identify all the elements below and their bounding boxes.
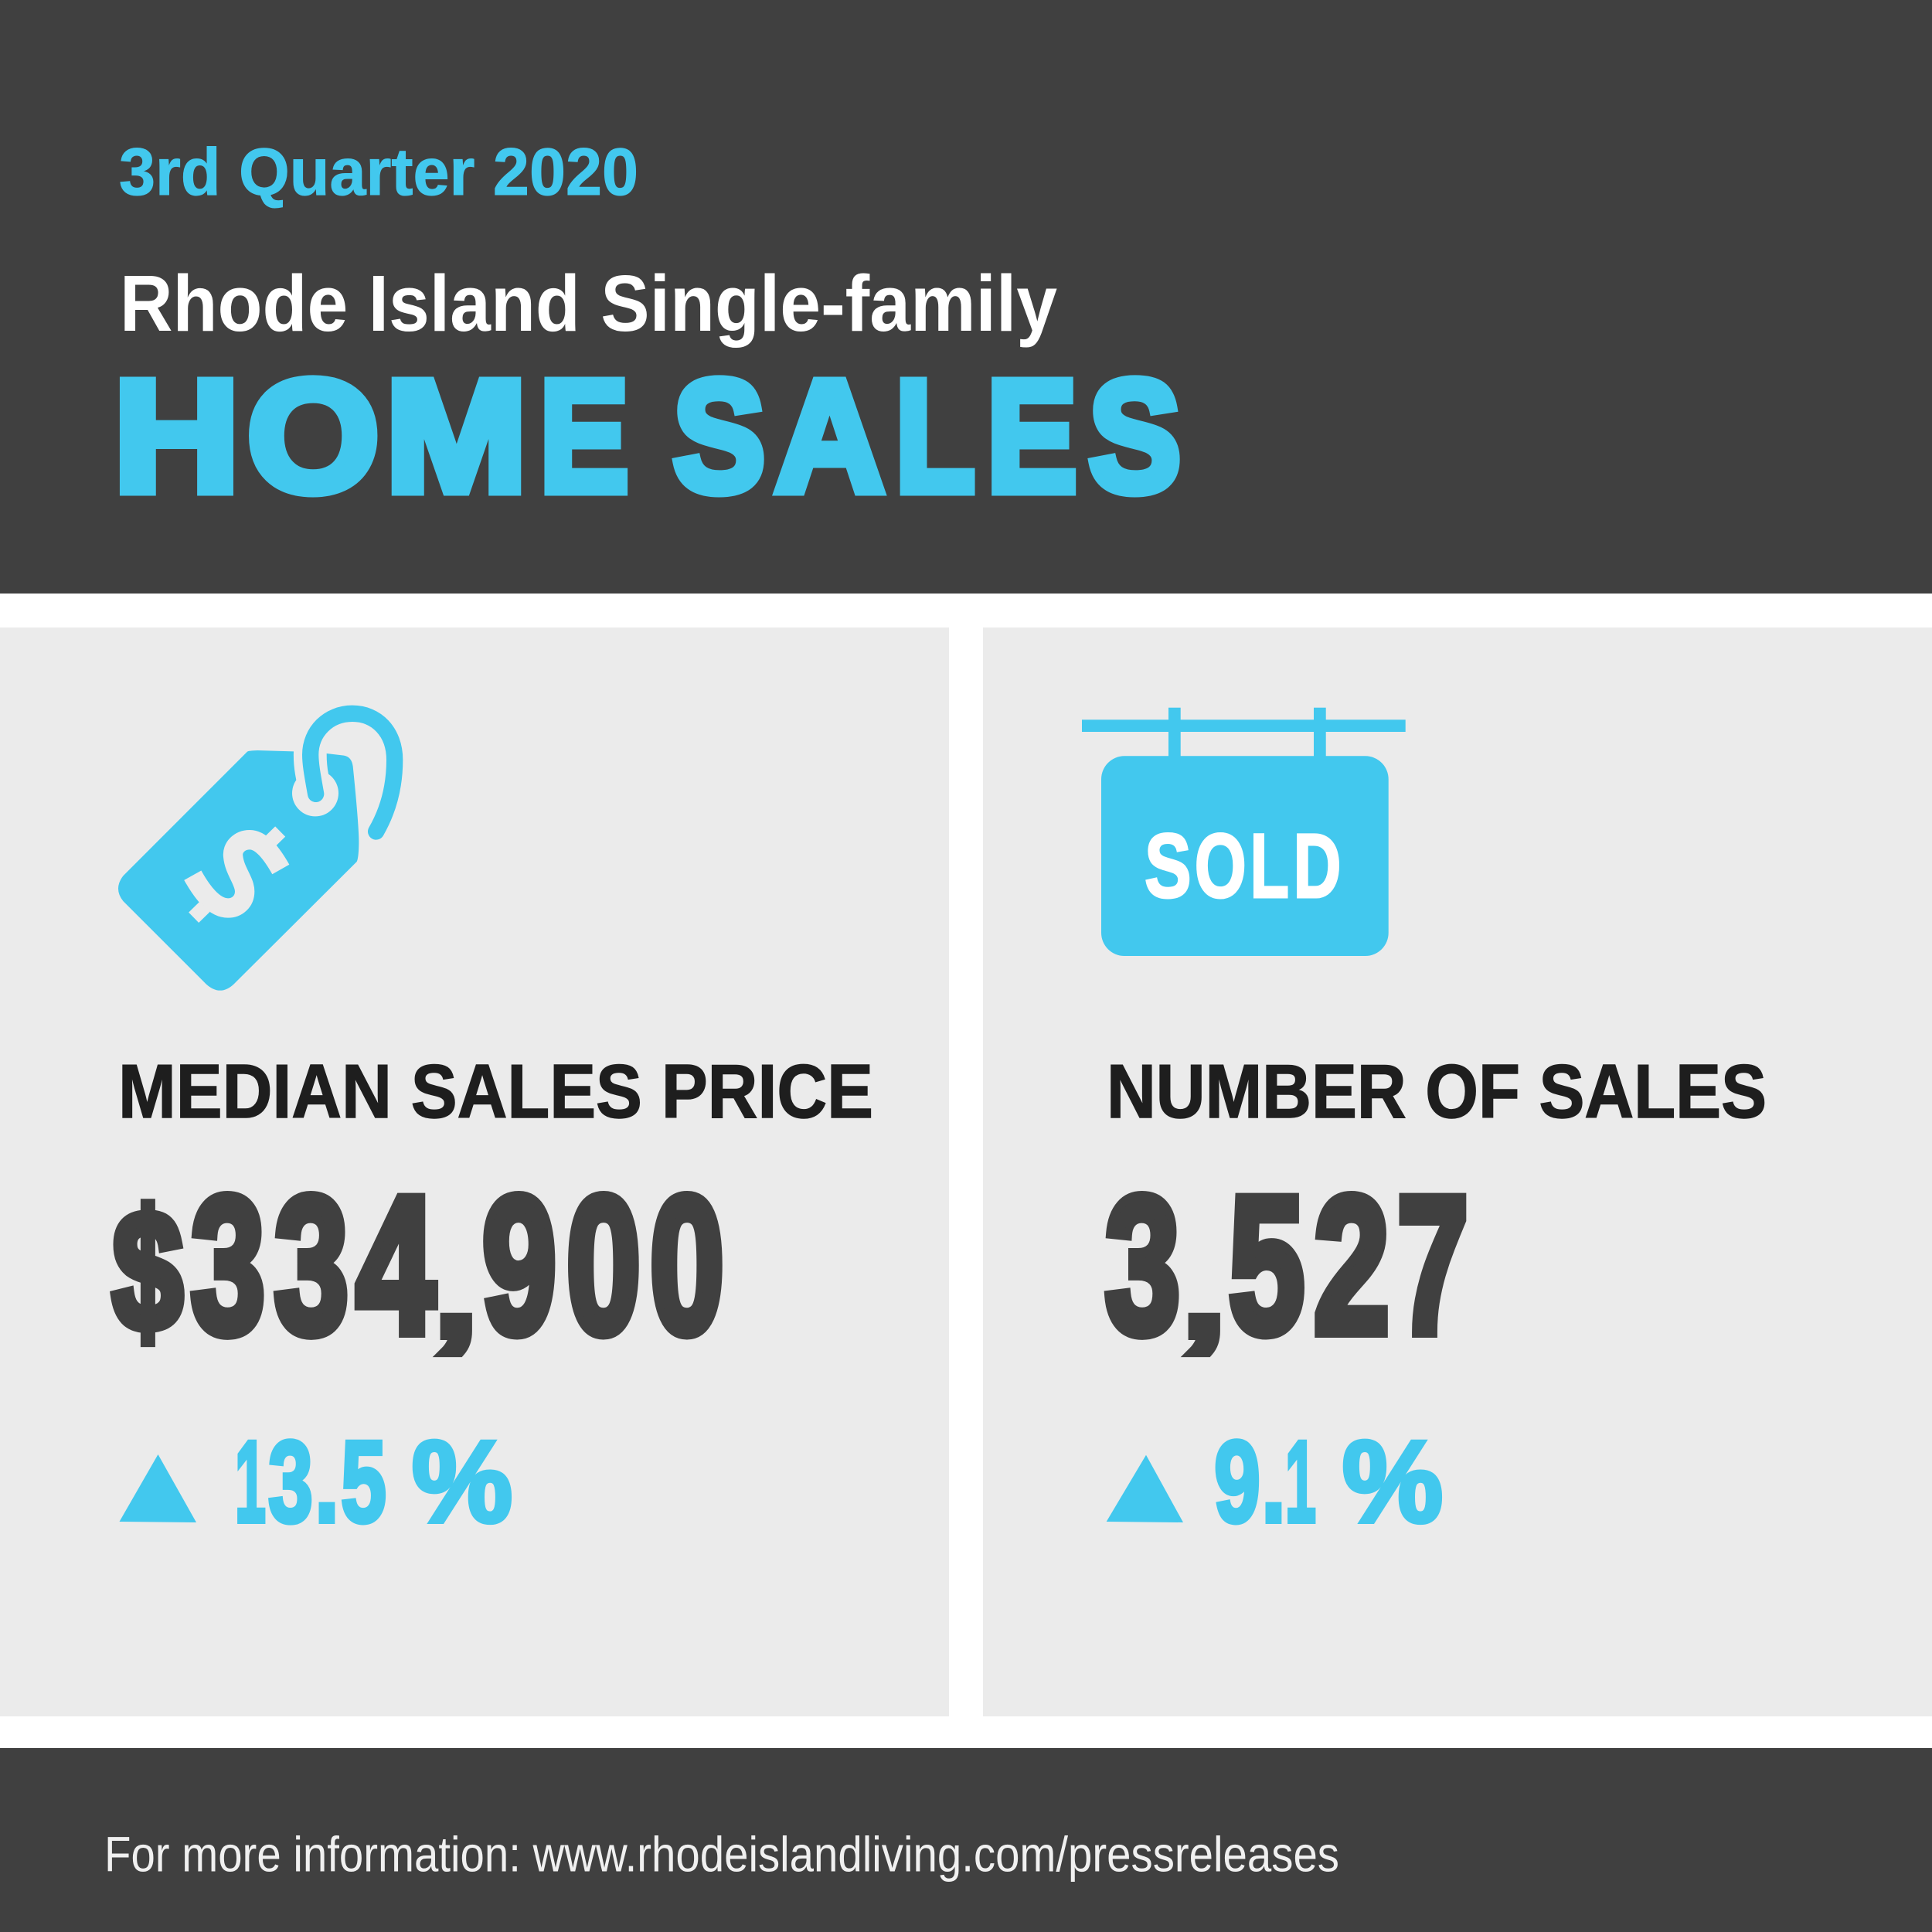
title: home sales: A <box>775 348 884 525</box>
value: sales change: 1 <box>1285 1417 1316 1546</box>
value: price change: 3 <box>268 1417 313 1546</box>
icon: up triangle <box>119 1454 196 1522</box>
subtitle: quarter: 3rd Quarter 2020 <box>119 135 638 209</box>
value: number of sales: 5 <box>1229 1157 1304 1374</box>
value: sales change: 9 <box>1214 1417 1260 1546</box>
value: median price: 0 <box>650 1157 724 1374</box>
value: median price: 3 <box>274 1157 349 1374</box>
icon: up triangle <box>1107 1455 1183 1522</box>
value: median price: $ <box>113 1178 182 1366</box>
footer text: For more information: www.rhodeislandliving.com/pressreleases <box>104 1827 1339 1883</box>
value: price change: 1 <box>235 1417 266 1546</box>
value: median price: 0 <box>566 1157 641 1374</box>
value: number of sales: 2 <box>1314 1157 1389 1374</box>
value: price change: . <box>315 1417 339 1546</box>
value: median price: 3 <box>191 1157 265 1374</box>
title: home sales: H <box>114 348 240 525</box>
value: median price: 9 <box>482 1157 556 1374</box>
heading: region: Rhode Island Single-family <box>120 259 1057 348</box>
panel: number of sales <box>983 628 1932 1716</box>
panel: median sales price <box>0 628 949 1716</box>
value: number of sales: , <box>1185 1236 1223 1359</box>
label: median sales price: MEDIAN SALES PRICE <box>118 1049 873 1134</box>
title: home sales: L <box>896 348 975 525</box>
title: home sales: M <box>386 348 527 525</box>
title: home sales: E <box>987 348 1077 525</box>
value: number of sales: 3 <box>1105 1157 1180 1374</box>
sign text: O <box>1195 815 1247 917</box>
value: number of sales: 7 <box>1397 1157 1468 1374</box>
sign text: D <box>1294 815 1342 917</box>
value: price change: 5 <box>341 1417 386 1546</box>
value: sales change: % <box>1342 1417 1443 1546</box>
label: number of sales: NUMBER OF SALES <box>1107 1049 1767 1134</box>
title: home sales: O <box>247 348 379 525</box>
value: sales change: . <box>1261 1417 1286 1546</box>
value: median price: 4 <box>356 1157 435 1374</box>
panel: header <box>0 0 1932 594</box>
icon: sold sign <box>1082 708 1406 956</box>
title: home sales: S <box>1089 348 1181 525</box>
title: home sales: E <box>539 348 628 525</box>
sign text: S <box>1145 815 1192 917</box>
panel: footer <box>0 1748 1932 1932</box>
value: median price: , <box>437 1236 474 1359</box>
sign text: L <box>1250 815 1289 917</box>
value: price change: % <box>412 1417 512 1546</box>
icon: price tag <box>118 713 395 991</box>
title: home sales: S <box>673 348 765 525</box>
